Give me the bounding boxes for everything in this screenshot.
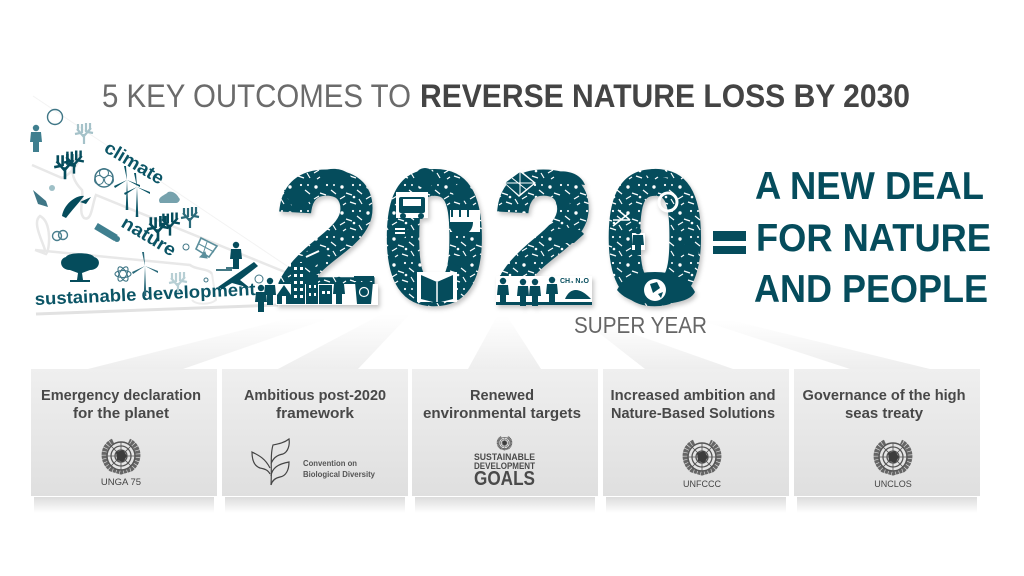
card: high seas treaty: UNCLOS — [874, 479, 912, 489]
card: post-2020 framework: Convention on — [303, 459, 357, 468]
fan label: climate: climate — [101, 137, 168, 188]
card: high seas treaty: seas treaty — [845, 406, 923, 422]
card: post-2020 framework: Ambitious post-2020 — [244, 388, 386, 404]
light beams from 2020 to outcome cards — [88, 314, 930, 369]
card: renewed environmental targets: environmental targets — [423, 406, 581, 422]
card: post-2020 framework: framework — [276, 406, 355, 422]
fan label: sustainable development: sustainable development — [34, 279, 256, 309]
numeral 2 second: 2 — [493, 134, 595, 340]
super year label: SUPER YEAR — [574, 312, 707, 338]
numeral 2: 2 — [275, 134, 379, 340]
card: high seas treaty: Governance of the high — [802, 388, 966, 404]
card: renewed environmental targets: DEVELOPMENT — [474, 461, 535, 471]
icons inside second 2: solar panel, tree, bear, family — [496, 170, 592, 306]
card: increased ambition: Increased ambition and — [610, 388, 776, 404]
icons inside first 0: car, bowl, book, fish — [392, 168, 480, 303]
icons inside first 2: city, bin, leaf — [276, 169, 378, 305]
logo: sustainable development goals — [498, 437, 511, 449]
card: renewed environmental targets: SUSTAINABLE — [474, 452, 535, 462]
logo: convention on biological diversity — [252, 439, 289, 485]
card: increased ambition — [603, 369, 789, 513]
headline: a new deal for nature and people — [754, 165, 991, 311]
card: post-2020 framework — [222, 369, 408, 513]
title: 5 KEY OUTCOMES TO — [102, 78, 411, 114]
card: emergency declaration: Emergency declaration — [41, 388, 201, 404]
fan label: nature: nature — [118, 212, 180, 260]
fan of paper strips: climate, nature, sustainable development — [30, 96, 290, 314]
card: renewed environmental targets: Renewed — [470, 388, 534, 404]
headline: a new deal for nature and people: AND PEOPLE — [754, 268, 988, 311]
equals sign — [713, 231, 746, 254]
card: increased ambition: UNFCCC — [683, 479, 721, 489]
card: renewed environmental targets — [412, 369, 598, 513]
card: emergency declaration: UNGA 75 — [101, 477, 141, 488]
logo: UN emblem — [104, 441, 138, 472]
title — [102, 78, 910, 114]
card: emergency declaration: for the planet — [73, 406, 169, 422]
card: increased ambition: Nature-Based Solutions — [611, 406, 775, 422]
card: high seas treaty — [794, 369, 980, 513]
card: renewed environmental targets: GOALS — [474, 468, 535, 490]
headline: a new deal for nature and people: A NEW DEAL — [755, 165, 984, 208]
logo: UN emblem UNCLOS — [876, 442, 910, 473]
headline: a new deal for nature and people: FOR NATURE — [756, 217, 991, 260]
fan icons — [30, 110, 276, 312]
big 2020 numerals made of icons — [275, 134, 705, 340]
title: REVERSE NATURE LOSS BY 2030 — [420, 78, 910, 114]
card: post-2020 framework: Biological Diversity — [303, 470, 376, 479]
card: emergency declaration — [31, 369, 217, 513]
icons inside second 0: recycle, globe, sun, cloud — [613, 169, 699, 304]
numeral 0: 0 — [383, 134, 486, 340]
numeral 0 second: 0 — [605, 134, 705, 340]
icons inside second 2: solar panel, tree, bear, family: CH₄ N₂O — [560, 278, 590, 285]
logo: UN emblem UNFCCC — [685, 442, 719, 473]
